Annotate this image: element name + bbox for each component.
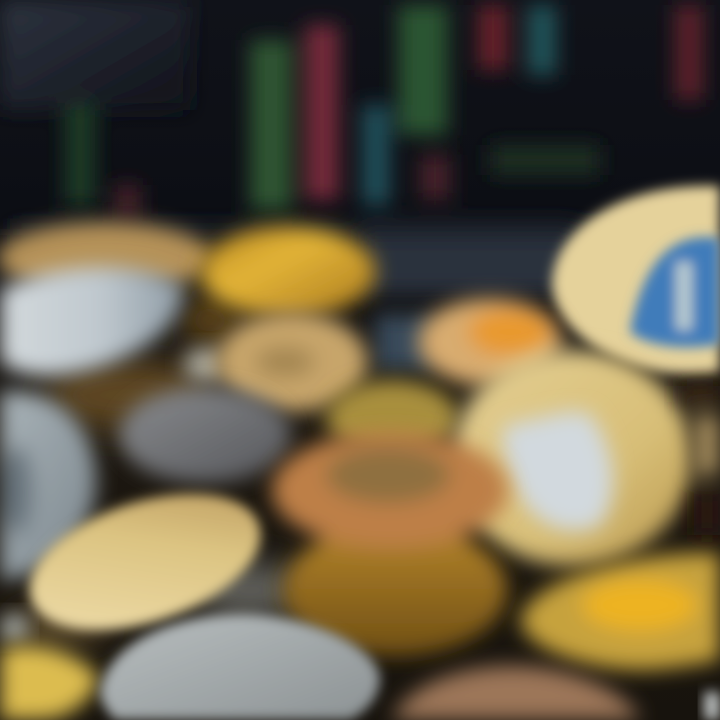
coin: gold bottom-right xyxy=(520,553,720,670)
coin: copper stack centre xyxy=(272,432,508,656)
coin: large pale coin top-right xyxy=(552,186,720,374)
coin: dark edge at right xyxy=(680,385,720,535)
icon: silver emblem on cream coin xyxy=(503,412,613,531)
coin: gold top-centre xyxy=(200,226,376,318)
coin: small gold mid xyxy=(326,380,458,456)
coin: top-left gold rim xyxy=(0,222,213,294)
coin: silver left edge xyxy=(0,391,96,580)
highlight: silver glint under gold coin xyxy=(183,347,227,383)
coin: beige centre xyxy=(216,312,368,412)
shadow: warm tones between coins xyxy=(10,295,305,640)
coin: silver bottom xyxy=(100,614,380,720)
icon: blue emblem on coin xyxy=(630,237,720,347)
coin: orange mid-right xyxy=(418,298,562,386)
coin: silver bottom-left sliver xyxy=(0,614,28,642)
coin: copper bottom xyxy=(392,666,640,720)
coin: cream bottom-left xyxy=(12,468,278,656)
background: dark trading chart with candlesticks xyxy=(0,0,710,370)
coin: yellow bottom-left xyxy=(0,645,100,720)
coin: silver top-left xyxy=(0,267,183,376)
coin: silver corner glint xyxy=(704,692,720,720)
coin: large cream coin with silver emblem xyxy=(452,350,692,566)
coin: grey dark silver xyxy=(119,387,291,483)
